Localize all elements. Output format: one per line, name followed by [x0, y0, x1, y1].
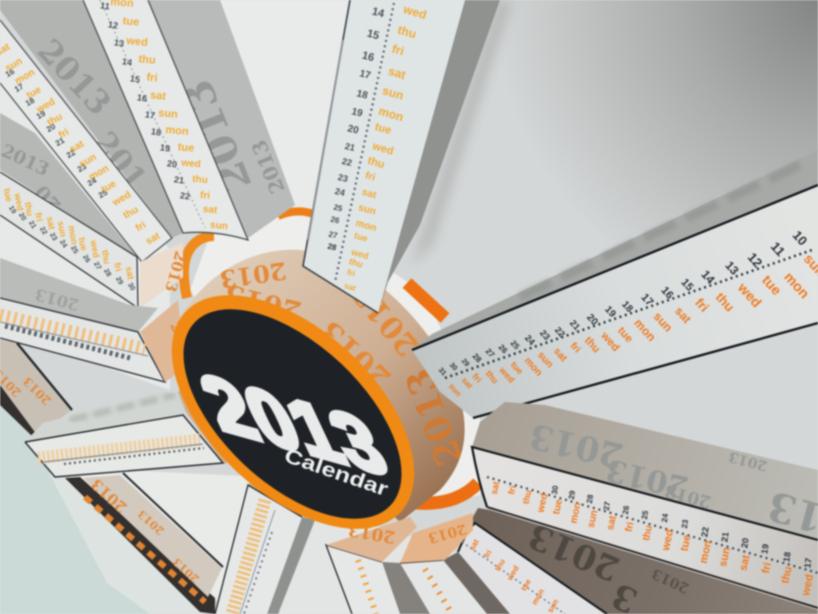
weekday labels: thu [779, 565, 795, 585]
strip side [267, 517, 315, 614]
second left strip [0, 20, 172, 262]
weekday labels: mon [87, 163, 111, 183]
date numbers: 22 [699, 526, 711, 538]
weekday labels: thu [484, 368, 500, 386]
weekday labels: fri [346, 268, 356, 278]
date numbers: 21 [173, 174, 185, 186]
date numbers: 28 [327, 242, 338, 253]
strip side [0, 113, 137, 257]
lower right strip: 2013 [526, 415, 627, 475]
weekday labels: wed [660, 528, 676, 553]
date numbers: 16 [361, 50, 375, 64]
third left strip [0, 113, 190, 308]
year title: 2013 [187, 357, 401, 495]
strip front [0, 298, 165, 382]
date numbers: 17 [144, 109, 156, 121]
weekday labels: sun [4, 56, 24, 74]
date numbers: 31 [437, 367, 447, 377]
strip front [472, 447, 818, 608]
weekday labels: tue [509, 360, 525, 376]
date numbers: 22 [38, 226, 48, 236]
date numbers: 30 [126, 282, 136, 292]
strip panel [0, 340, 72, 435]
weekday labels: mon [781, 269, 813, 301]
date numbers [100, 0, 191, 202]
date numbers: 20 [166, 158, 178, 170]
date numbers: 28 [585, 493, 595, 504]
date numbers: 22 [65, 148, 78, 160]
date numbers: 30 [550, 484, 560, 495]
date numbers [327, 6, 386, 253]
weekday labels: thu [122, 204, 140, 222]
weekday labels: thu [46, 111, 64, 129]
strip front [400, 560, 487, 614]
weekday labels: mon [568, 502, 584, 524]
weekday labels: sat [460, 376, 474, 391]
weekday labels: tue [615, 325, 635, 345]
weekday labels: thu [100, 249, 112, 265]
weekday labels: wed [180, 158, 201, 170]
third left strip: 20 [30, 180, 66, 217]
date numbers: 29 [114, 276, 124, 286]
weekday marks [38, 440, 200, 458]
date numbers: 16 [658, 284, 676, 302]
weekday labels: sun [546, 597, 561, 614]
dark band [0, 385, 37, 437]
date numbers: 26 [621, 504, 631, 515]
date numbers: 23 [48, 232, 58, 242]
date numbers: 24 [58, 239, 68, 249]
date numbers: 11 [100, 0, 110, 12]
weekday labels: fri [134, 220, 148, 234]
dark band [65, 477, 215, 614]
date numbers: 19 [35, 109, 48, 121]
weekday labels: sun [651, 309, 675, 335]
cylinder hub with repeated 2013 [178, 250, 471, 522]
upper left strip: 2013 [172, 73, 261, 200]
date numbers: 14 [698, 267, 718, 287]
weekday labels: thu [641, 524, 655, 542]
third left strip: 2013 [161, 249, 190, 294]
date numbers: 12 [745, 250, 765, 270]
date numbers: 28 [102, 268, 112, 278]
date numbers: 22 [179, 190, 191, 202]
weekday labels: mon [66, 225, 80, 245]
weekday labels: wed [401, 2, 428, 22]
weekday labels: wed [497, 364, 517, 385]
weekday labels: wed [800, 573, 816, 598]
weekday labels: fri [624, 521, 636, 533]
weekday labels: sat [144, 230, 163, 247]
weekday labels: wed [125, 35, 148, 49]
weekday labels: sun [381, 83, 405, 103]
date numbers: 21 [54, 136, 67, 148]
weekday labels: fri [568, 341, 583, 356]
date numbers: 19 [7, 205, 17, 215]
date numbers: 26 [497, 343, 510, 356]
date numbers: 22 [341, 156, 353, 168]
far left orange strip: 2013 [21, 374, 54, 408]
strip side [378, 0, 500, 313]
bottom strip [215, 478, 315, 614]
date numbers: 10 [790, 228, 810, 248]
date numbers [4, 67, 110, 200]
date numbers: 26 [81, 254, 91, 264]
weekday labels [343, 2, 428, 293]
date numbers: 29 [460, 358, 470, 368]
strip front [83, 0, 248, 240]
weekday marks [232, 500, 265, 614]
date numbers: 26 [330, 215, 341, 226]
strip side [412, 150, 818, 350]
strip front [215, 485, 302, 614]
date numbers: 23 [337, 172, 349, 184]
tan tab [326, 517, 417, 562]
weekday labels: wed [12, 192, 25, 211]
date numbers: 14 [371, 6, 386, 21]
weekday labels: sat [737, 554, 753, 572]
centre left strip [25, 380, 236, 477]
upper left strip: 2013 [30, 32, 119, 123]
date numbers: 21 [344, 141, 356, 153]
weekday labels: sat [343, 281, 357, 293]
weekday labels: fri [482, 548, 494, 560]
weekday labels: sun [586, 509, 600, 529]
date numbers: 19 [159, 142, 171, 154]
weekday labels: tue [551, 498, 565, 515]
strip side right [148, 0, 295, 238]
weekday labels: sat [672, 304, 694, 326]
weekday labels: thu [192, 174, 208, 186]
weekday labels: sat [68, 138, 87, 155]
date numbers: 25 [69, 245, 79, 255]
weekday labels: tue [353, 230, 369, 244]
weekday labels: fri [112, 262, 124, 272]
bottom left strip: 2013 [136, 507, 167, 537]
date numbers: 15 [678, 276, 696, 294]
weekday labels: sat [489, 481, 501, 495]
tan tab [248, 478, 315, 518]
weekday labels: sun [535, 350, 555, 370]
weekday labels: sun [717, 546, 733, 568]
strip shadow [412, 0, 512, 265]
upper left strip: 2013 [247, 137, 290, 197]
weekday labels: tue [759, 272, 785, 298]
strip front [0, 20, 172, 262]
weekday labels: wed [88, 239, 101, 258]
date numbers: 28 [471, 352, 484, 365]
weekday labels: sat [467, 537, 481, 552]
date numbers [7, 205, 136, 292]
weekday labels: sat [551, 346, 569, 365]
strip front [458, 523, 607, 614]
weekday labels: wed [110, 189, 133, 209]
date numbers: 24 [660, 512, 670, 523]
lower right strip: 2013 [603, 451, 692, 504]
strip front [303, 0, 465, 313]
date numbers: 13 [722, 258, 742, 278]
strip side [25, 388, 188, 442]
right strip [412, 150, 818, 418]
date numbers: 25 [97, 188, 110, 200]
weekday labels: fri [200, 190, 211, 202]
dark bottom right strip [458, 508, 818, 614]
bottom left strip: 2013 [171, 555, 202, 585]
weekday labels: mon [354, 218, 378, 234]
date numbers: 27 [602, 500, 612, 511]
date numbers: 22 [553, 325, 567, 339]
date numbers: 16 [136, 92, 148, 104]
date numbers: 17 [358, 68, 372, 82]
strip front [412, 185, 818, 418]
lower right strip: 2013 [662, 480, 713, 511]
date numbers: 11 [768, 239, 788, 259]
strip side [443, 552, 510, 614]
date numbers: 27 [92, 261, 102, 271]
dotted date line [487, 477, 818, 573]
weekday labels: fri [760, 561, 774, 575]
tan tab [140, 300, 185, 382]
weekday labels: wed [34, 96, 57, 116]
weekday labels: sat [387, 64, 407, 82]
cylinder hub with repeated 2013: 2013 [218, 256, 288, 294]
date numbers: 29 [567, 489, 577, 500]
strip panel [83, 475, 222, 597]
bottom left strip: 2013 [88, 475, 131, 516]
date numbers: 23 [680, 518, 690, 529]
weekday labels: sun [78, 152, 98, 170]
weekday labels [110, 0, 228, 232]
date numbers: 25 [509, 339, 522, 352]
strip side left [0, 0, 183, 238]
strip side with 2013 [472, 402, 818, 540]
date numbers: 19 [350, 106, 364, 120]
date numbers: 27 [484, 347, 497, 360]
tan tab [178, 380, 236, 464]
weekday labels [489, 481, 816, 598]
weekday labels: tue [122, 15, 140, 29]
weekday labels: sun [210, 220, 228, 232]
dotted date line [445, 250, 812, 378]
weekday labels: sat [605, 514, 619, 531]
weekday labels: wed [734, 279, 765, 310]
date numbers: 23 [76, 162, 89, 174]
strip front [0, 172, 138, 308]
weekday labels: mon [522, 355, 544, 379]
weekday labels: mon [698, 539, 714, 565]
weekday labels: thu [521, 489, 533, 505]
strip side [0, 258, 158, 332]
weekday labels: tue [77, 236, 89, 252]
weekday labels: sun [158, 107, 179, 121]
weekday labels: sun [56, 220, 68, 238]
weekday labels: thu [23, 201, 35, 217]
weekday labels: tue [177, 141, 195, 155]
weekday labels: sat [202, 204, 218, 216]
weekday labels: tue [519, 577, 533, 592]
date numbers: 18 [24, 96, 37, 108]
cylinder hub with repeated 2013: 2013 [346, 276, 426, 362]
weekday labels: sat [45, 216, 57, 230]
date numbers: 20 [45, 122, 58, 134]
orange rim [130, 252, 456, 572]
date numbers: 15 [366, 28, 380, 42]
date numbers: 24 [334, 186, 346, 198]
weekday labels: sat [150, 89, 167, 103]
date numbers: 21 [27, 220, 37, 230]
tan tab [400, 513, 473, 563]
weekday labels: mon [530, 587, 546, 607]
small bottom strips [326, 513, 510, 614]
date numbers: 18 [781, 551, 793, 563]
lower right strip: 2013 [727, 448, 769, 474]
date numbers: 18 [355, 88, 369, 102]
strip side [382, 562, 430, 614]
dark side with 2013 [458, 508, 818, 614]
tan tab [140, 242, 183, 308]
strip front [326, 545, 400, 614]
weekday labels: sat [124, 266, 136, 280]
top strip [303, 0, 512, 313]
weekday labels: thu [138, 53, 156, 67]
weekday labels: tue [25, 84, 44, 102]
weekday labels: fri [692, 295, 712, 315]
weekday labels: sat [361, 187, 378, 201]
weekday labels: wed [505, 564, 521, 583]
weekday labels: tue [678, 534, 694, 552]
dark bottom right strip: 2013 [650, 565, 692, 596]
fourth left strip: 2013 [33, 285, 81, 314]
date numbers: 13 [113, 37, 125, 49]
date numbers: 24 [86, 176, 99, 188]
weekday labels [467, 537, 561, 614]
date marks [244, 532, 272, 614]
weekday labels [0, 41, 163, 247]
weekday labels: mon [377, 104, 405, 124]
weekday labels: fri [390, 42, 406, 58]
weekday labels: sun [447, 382, 463, 398]
date numbers: 15 [129, 73, 141, 85]
date numbers: 24 [523, 333, 537, 347]
date numbers [550, 484, 814, 569]
dark bottom right strip: 2013 [523, 515, 626, 589]
date numbers: 19 [759, 543, 771, 555]
cylinder hub with repeated 2013: 2013 [314, 313, 398, 396]
weekday labels: mon [631, 316, 659, 344]
date numbers: 16 [4, 67, 17, 79]
subtitle: Calendar [281, 445, 391, 501]
lower right strip [472, 402, 818, 608]
upper left strip [0, 0, 295, 240]
date marks [44, 444, 203, 462]
fourth left strip: 2013 [166, 320, 195, 359]
weekday labels: thu [493, 557, 507, 573]
date numbers: 20 [346, 123, 360, 137]
weekday labels: thu [713, 289, 737, 315]
date numbers: 20 [739, 537, 751, 549]
weekday labels: tue [100, 178, 119, 196]
date numbers: 20 [584, 312, 600, 328]
date numbers: 30 [448, 362, 458, 372]
date numbers: 18 [150, 126, 162, 138]
weekday labels: wed [370, 140, 395, 158]
weekday labels: fri [506, 485, 518, 495]
date numbers: 17 [638, 291, 656, 309]
weekday labels: fri [146, 72, 158, 84]
weekday labels: fri [470, 371, 484, 385]
weekday labels: fri [364, 170, 377, 184]
date numbers: 17 [13, 82, 26, 94]
weekday labels: wed [598, 329, 622, 354]
date numbers: 14 [121, 56, 133, 68]
cylinder hub with repeated 2013: 2013 [221, 277, 305, 328]
weekday labels: wed [535, 492, 550, 515]
strip front [25, 415, 223, 477]
weekday labels [2, 187, 136, 280]
weekday labels: mon [165, 124, 189, 138]
backing ring: orange circle on white [184, 211, 480, 510]
weekday labels: thu [366, 155, 386, 171]
upper left strip: 201 [87, 125, 153, 196]
weekday labels: thu [396, 23, 418, 41]
date marks [5, 326, 130, 358]
date numbers: 12 [107, 19, 119, 31]
date numbers: 27 [328, 230, 339, 241]
date numbers: 23 [538, 328, 552, 342]
date numbers: 25 [640, 509, 650, 520]
date numbers: 25 [333, 203, 344, 214]
weekday labels: fri [57, 127, 71, 141]
weekday labels: thu [582, 335, 602, 355]
weekday labels: wed [349, 247, 370, 261]
date numbers: 18 [619, 299, 635, 315]
date numbers: 21 [568, 318, 582, 332]
dotted date line [100, 0, 205, 228]
weekday labels: fri [33, 212, 45, 222]
dotted date line [335, 3, 394, 282]
weekday labels [447, 250, 818, 398]
small bottom strips: 2013 [347, 519, 397, 547]
weekday labels: tue [2, 187, 14, 203]
black face [147, 271, 438, 557]
date numbers: 21 [719, 531, 731, 543]
date numbers [437, 228, 810, 377]
date numbers: 20 [17, 212, 27, 222]
far left orange strip [0, 340, 72, 437]
weekday labels: tue [373, 121, 393, 137]
date numbers: 17 [802, 557, 814, 569]
date numbers: 19 [602, 304, 618, 320]
main disc: 2013 Calendar [130, 252, 456, 572]
weekday labels: sun [357, 202, 377, 218]
weekday marks [0, 315, 145, 349]
cylinder hub with repeated 2013: 2013 [398, 363, 471, 471]
weekday labels: mon [13, 67, 37, 87]
small bottom strips: 2013 [426, 520, 468, 546]
weekday labels: thu [348, 256, 364, 270]
fourth left strip [0, 258, 195, 382]
bottom left strip [65, 473, 223, 614]
